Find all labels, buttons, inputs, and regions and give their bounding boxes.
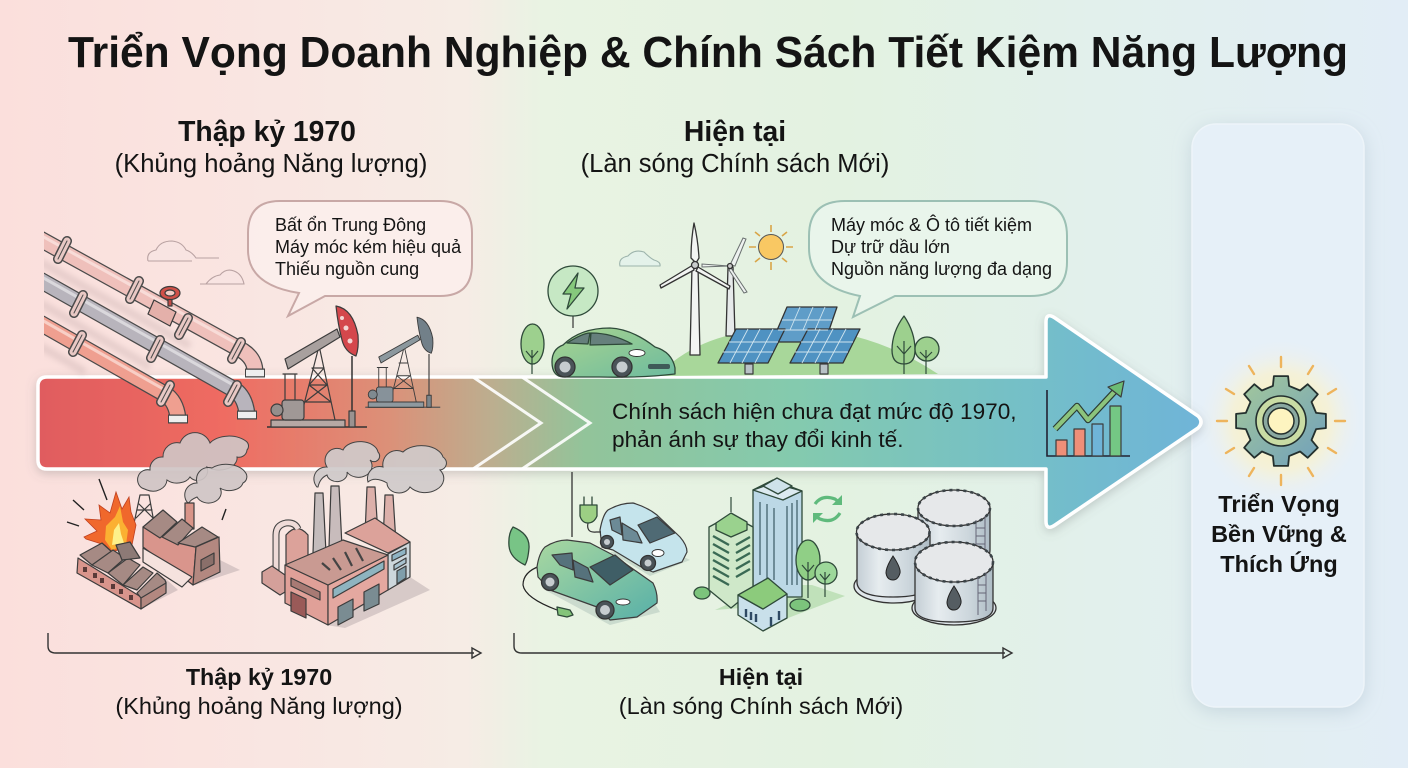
heading: present new policy wave (581, 115, 889, 178)
bottom label: present: Hiện tại (719, 664, 803, 690)
arrow message text (612, 399, 1017, 452)
ground shadow (715, 585, 845, 625)
timeline bracket: 1970s (48, 633, 481, 658)
right hall window (201, 553, 214, 571)
chimney (185, 503, 194, 529)
blue tower (753, 480, 802, 597)
silo (286, 528, 308, 565)
annex (345, 518, 410, 553)
icon: electric bolt badge (548, 266, 598, 328)
panel: outlook column (1192, 124, 1364, 707)
hall (285, 565, 328, 625)
icon: green electric car charging (523, 540, 660, 625)
pipe (276, 523, 298, 572)
bottom label: present (619, 664, 903, 719)
icon: glowing gear with rays (1199, 339, 1363, 503)
bottom label: 1970s: (Khủng hoảng Năng lượng) (115, 693, 403, 719)
speech bubble: present measures: Nguồn năng lượng đa dạng (831, 259, 1052, 279)
outlook label: Thích Ứng (1220, 550, 1338, 577)
ground shadow (141, 560, 240, 609)
trees on right of solar panels (892, 316, 939, 374)
icon: green electric car (552, 328, 675, 377)
title: Triển Vọng Doanh Nghiệp & Chính Sách Tiết Kiệm Năng Lượng (68, 28, 1348, 77)
solar panels (718, 307, 860, 374)
windows row (85, 567, 131, 600)
speech bubble: present measures: Máy móc & Ô tô tiết kiệm (831, 214, 1032, 235)
right hall side wall (193, 537, 220, 585)
main timeline arrow (38, 316, 1201, 527)
icon: blue electric car with plug (580, 497, 690, 576)
outlook label: Triển Vọng (1218, 491, 1340, 517)
icon: recycle arrows (813, 495, 842, 523)
wind turbines (660, 223, 747, 355)
outlook label (1211, 491, 1347, 577)
arrow message text: phản ánh sự thay đổi kinh tế. (612, 427, 903, 452)
lower wing (143, 548, 192, 587)
bushes (694, 587, 710, 599)
debris lines (67, 479, 226, 526)
heading: present new policy wave: Hiện tại (684, 115, 786, 147)
charging line (571, 472, 573, 537)
icon: leaf (509, 527, 529, 565)
speech bubble: present measures: Dự trữ dầu lớn (831, 237, 950, 257)
speech bubble: present measures (809, 201, 1067, 317)
green tower (709, 515, 753, 608)
outlook label: Bền Vững & (1211, 521, 1347, 547)
factory: damaged plant with explosion (67, 433, 249, 609)
small house (738, 594, 787, 631)
hall openings (291, 592, 306, 618)
explosion (84, 492, 136, 552)
small turbine (702, 238, 747, 336)
tree beside green car (521, 324, 544, 374)
tank back (918, 490, 990, 566)
smoke plumes (314, 442, 380, 487)
smoke plumes (138, 433, 249, 491)
icon: sun (749, 225, 793, 270)
clouds near pipelines (148, 241, 244, 284)
tank left (854, 514, 934, 603)
tank front (912, 542, 996, 625)
right hall wall (143, 527, 196, 585)
factory: modern plant with chimneys (262, 442, 446, 628)
right hall roof teeth (143, 510, 177, 538)
arrow message text: Chính sách hiện chưa đạt mức độ 1970, (612, 399, 1017, 424)
icon: pipeline valve (148, 286, 180, 326)
chimneys (313, 493, 326, 553)
icon: green buildings (694, 478, 845, 631)
bottom label: present: (Làn sóng Chính sách Mới) (619, 693, 903, 719)
heading: 1970s energy crisis: Thập kỷ 1970 (178, 115, 356, 147)
heading: 1970s energy crisis (115, 115, 427, 178)
trees (796, 540, 820, 580)
heading: 1970s energy crisis: (Khủng hoảng Năng lượng) (115, 150, 427, 178)
timeline bracket: present (514, 633, 1012, 658)
bottom label: 1970s: Thập kỷ 1970 (186, 664, 332, 690)
speech bubble: 1970s causes: Bất ổn Trung Đông (275, 215, 426, 235)
long shed wall (77, 558, 141, 609)
hill (657, 329, 938, 376)
pump box (262, 566, 285, 595)
heading: present new policy wave: (Làn sóng Chính sách Mới) (581, 150, 889, 178)
speech bubble: 1970s causes: Máy móc kém hiệu quả (275, 237, 462, 257)
bottom label: 1970s (115, 664, 403, 719)
pipelines (40, 235, 265, 419)
cloud over turbines (620, 251, 660, 266)
long shed roof teeth (80, 543, 112, 565)
speech bubble: 1970s causes (248, 201, 472, 316)
large turbine (660, 223, 730, 355)
icon: small oil pump jack (365, 317, 440, 407)
speech bubble: 1970s causes: Thiếu nguồn cung (275, 259, 419, 279)
derrick tower (133, 495, 155, 528)
long shed end (141, 582, 166, 609)
ground shadow (326, 577, 430, 628)
icon: oil storage tanks (854, 490, 996, 625)
icon: large oil pump jack (267, 306, 367, 427)
icon: growth chart (1047, 381, 1130, 456)
